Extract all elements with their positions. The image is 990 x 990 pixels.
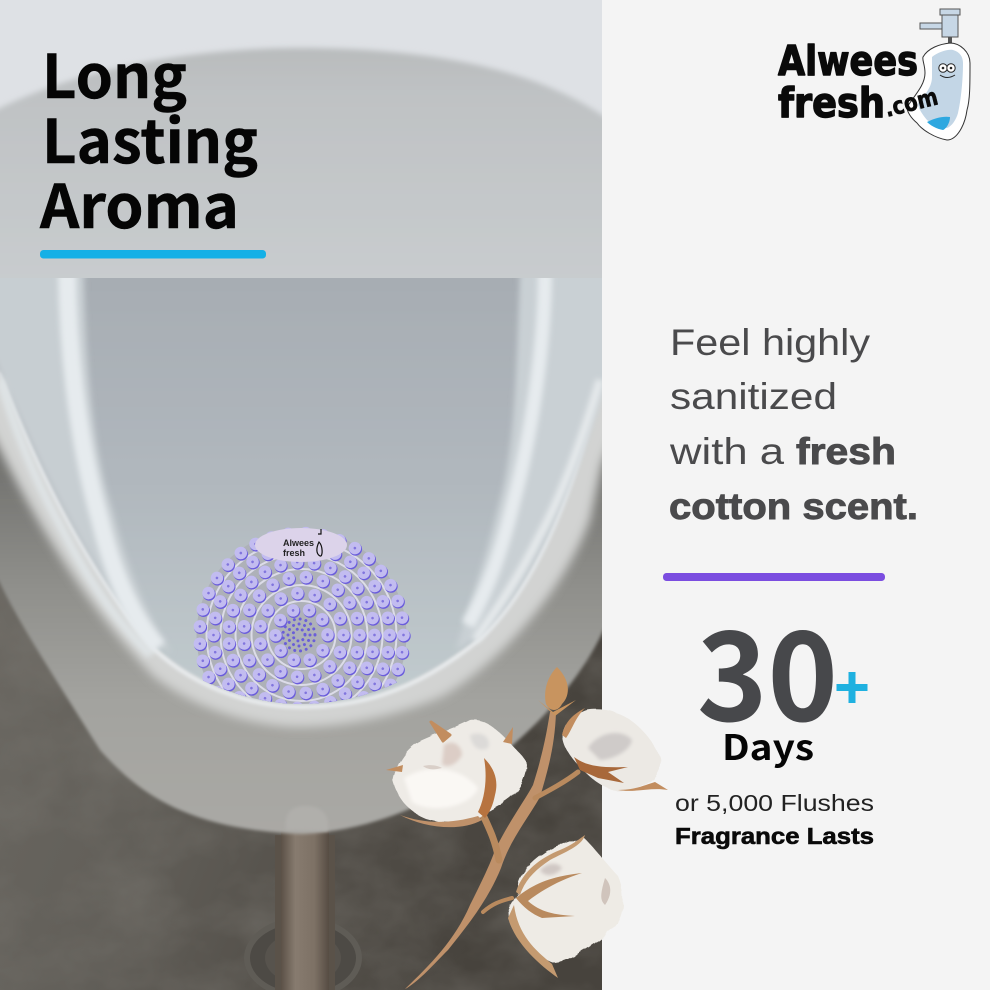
centre flower	[283, 619, 315, 651]
screen brand tag: Alwees	[283, 538, 314, 548]
purple divider	[663, 573, 885, 581]
tagline: with a	[669, 431, 784, 472]
urinal lip glow	[0, 368, 602, 732]
bowl seen through band	[0, 46, 602, 278]
urinal outer body	[0, 454, 602, 836]
left rim streak	[0, 380, 150, 655]
bowl interior	[30, 278, 522, 704]
heading: Aroma	[39, 159, 239, 246]
right wall	[460, 278, 602, 644]
left wall	[0, 278, 146, 608]
logo wordmark: .com	[882, 83, 941, 123]
floor flange	[247, 920, 359, 990]
heading: Lasting	[42, 94, 258, 181]
top translucent band	[0, 0, 602, 278]
brand logo	[778, 9, 970, 140]
drain pipe	[281, 825, 329, 990]
main stem	[405, 712, 556, 989]
band streak left	[58, 180, 74, 290]
logo wordmark: Alwees	[778, 37, 918, 85]
tagline: cotton scent.	[669, 486, 918, 527]
heading	[39, 29, 258, 246]
band streak right	[540, 120, 554, 290]
outlet nipple	[320, 829, 328, 833]
cotton branch illustration	[386, 667, 668, 989]
logo wordmark: fresh	[778, 79, 885, 127]
left white streak	[67, 270, 158, 648]
screen beads	[194, 526, 411, 704]
fragrance label: Fragrance Lasts	[675, 823, 874, 849]
logo urinal mascot	[907, 9, 970, 140]
screen brand tag: fresh	[283, 548, 305, 558]
heading underline	[40, 250, 266, 258]
tagline: sanitized	[670, 376, 837, 417]
tagline: Feel highly	[670, 322, 871, 363]
band base	[0, 0, 602, 116]
urinal photo	[0, 0, 632, 990]
cotton boll top right	[562, 708, 668, 792]
rim highlight	[0, 369, 602, 707]
right rim streak	[475, 380, 600, 640]
tagline: fresh	[796, 431, 896, 472]
cotton boll bottom right	[508, 835, 623, 978]
air freshener screen	[194, 526, 411, 704]
cotton boll left	[386, 720, 527, 827]
heading: Long	[42, 29, 187, 116]
screen brand tag	[255, 528, 347, 562]
stem branches	[483, 772, 578, 912]
logo wordmark	[778, 37, 941, 127]
number 30: 30	[697, 577, 838, 757]
right panel background	[602, 0, 990, 990]
cotton bud	[538, 667, 576, 716]
floor	[0, 578, 602, 990]
flushes label: or 5,000 Flushes	[675, 790, 874, 816]
floor mottling	[94, 656, 602, 990]
days label: Days	[722, 720, 814, 771]
duration stat	[675, 577, 874, 849]
right white streak	[468, 270, 545, 625]
plus sign	[836, 672, 868, 703]
tagline	[669, 322, 918, 527]
pipe rail	[275, 835, 335, 990]
